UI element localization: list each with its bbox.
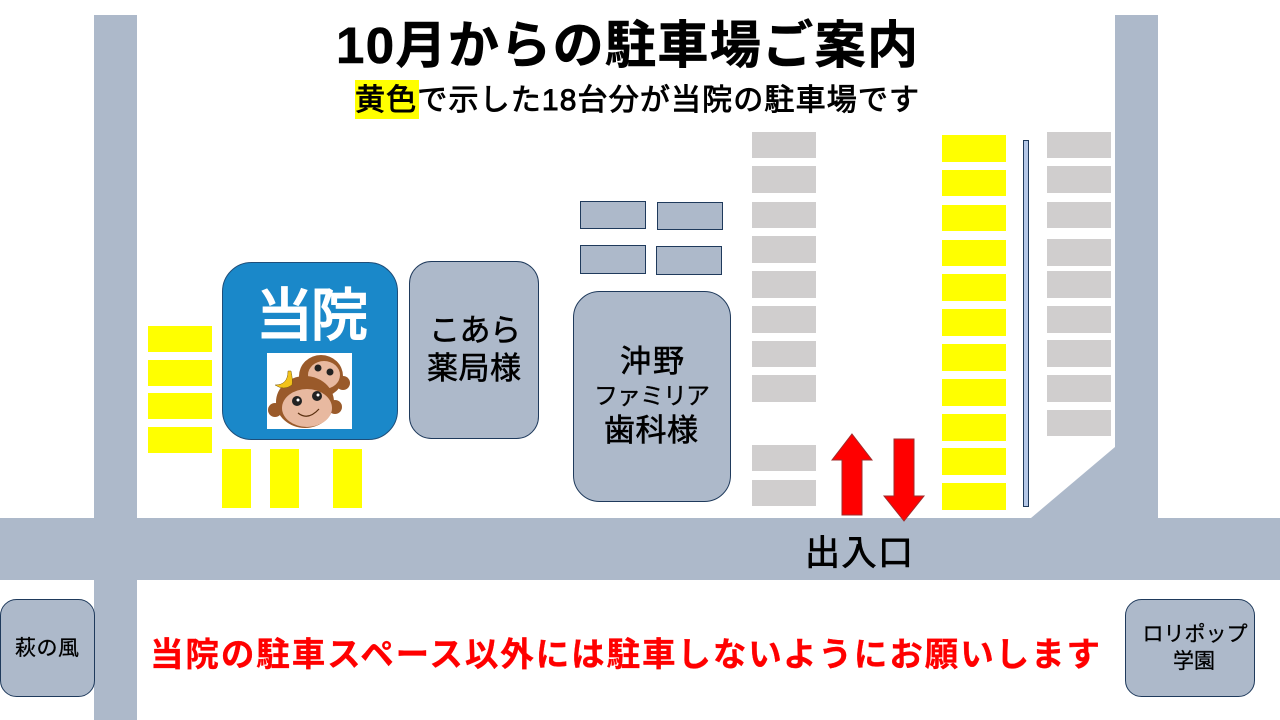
panel: pharmacy: 薬局様 [427, 351, 521, 386]
hospital parking: bottom yellow spaces [222, 449, 362, 508]
warning message: 当院の駐車スペース以外には駐車しないようにお願いします [150, 637, 1100, 674]
subtitle [355, 80, 919, 119]
front monkey [268, 376, 342, 428]
panel: pharmacy [410, 262, 538, 438]
gray parking: centre column [752, 132, 816, 506]
panel: dental clinic: ファミリア [594, 383, 710, 410]
hospital parking: yellow column [942, 135, 1006, 510]
panel: Lollipop school [1126, 600, 1254, 696]
hospital label: 当院 [256, 284, 368, 348]
icon: monkey mascots [267, 353, 352, 429]
arrow: entry up [832, 434, 872, 515]
panel: hospital building [222, 262, 398, 440]
Hagi no Kaze label: 萩の風 [15, 637, 79, 660]
gray parking: right column [1047, 132, 1111, 436]
clinic parking spaces [580, 202, 722, 274]
school name: ロリポップ [1142, 623, 1248, 646]
panel: dental clinic: 歯科様 [604, 413, 698, 448]
arrow: exit down [884, 439, 924, 521]
divider strip [1024, 140, 1028, 506]
entrance label: 出入口 [805, 534, 913, 573]
panel: Hagi no Kaze [0, 600, 94, 696]
panel: dental clinic [574, 292, 730, 502]
panel: Lollipop school: 学園 [1173, 650, 1215, 673]
pharmacy name: こあら [429, 313, 521, 348]
title: 10月からの駐車場ご案内 [336, 17, 918, 74]
clinic name: 沖野 [620, 344, 684, 379]
hospital parking: left yellow spaces [148, 326, 212, 453]
banana [275, 371, 292, 388]
back monkey [299, 355, 350, 397]
subtitle text: 黄色で示した18台分が当院の駐車場です [355, 84, 919, 117]
yellow highlight [355, 80, 419, 119]
